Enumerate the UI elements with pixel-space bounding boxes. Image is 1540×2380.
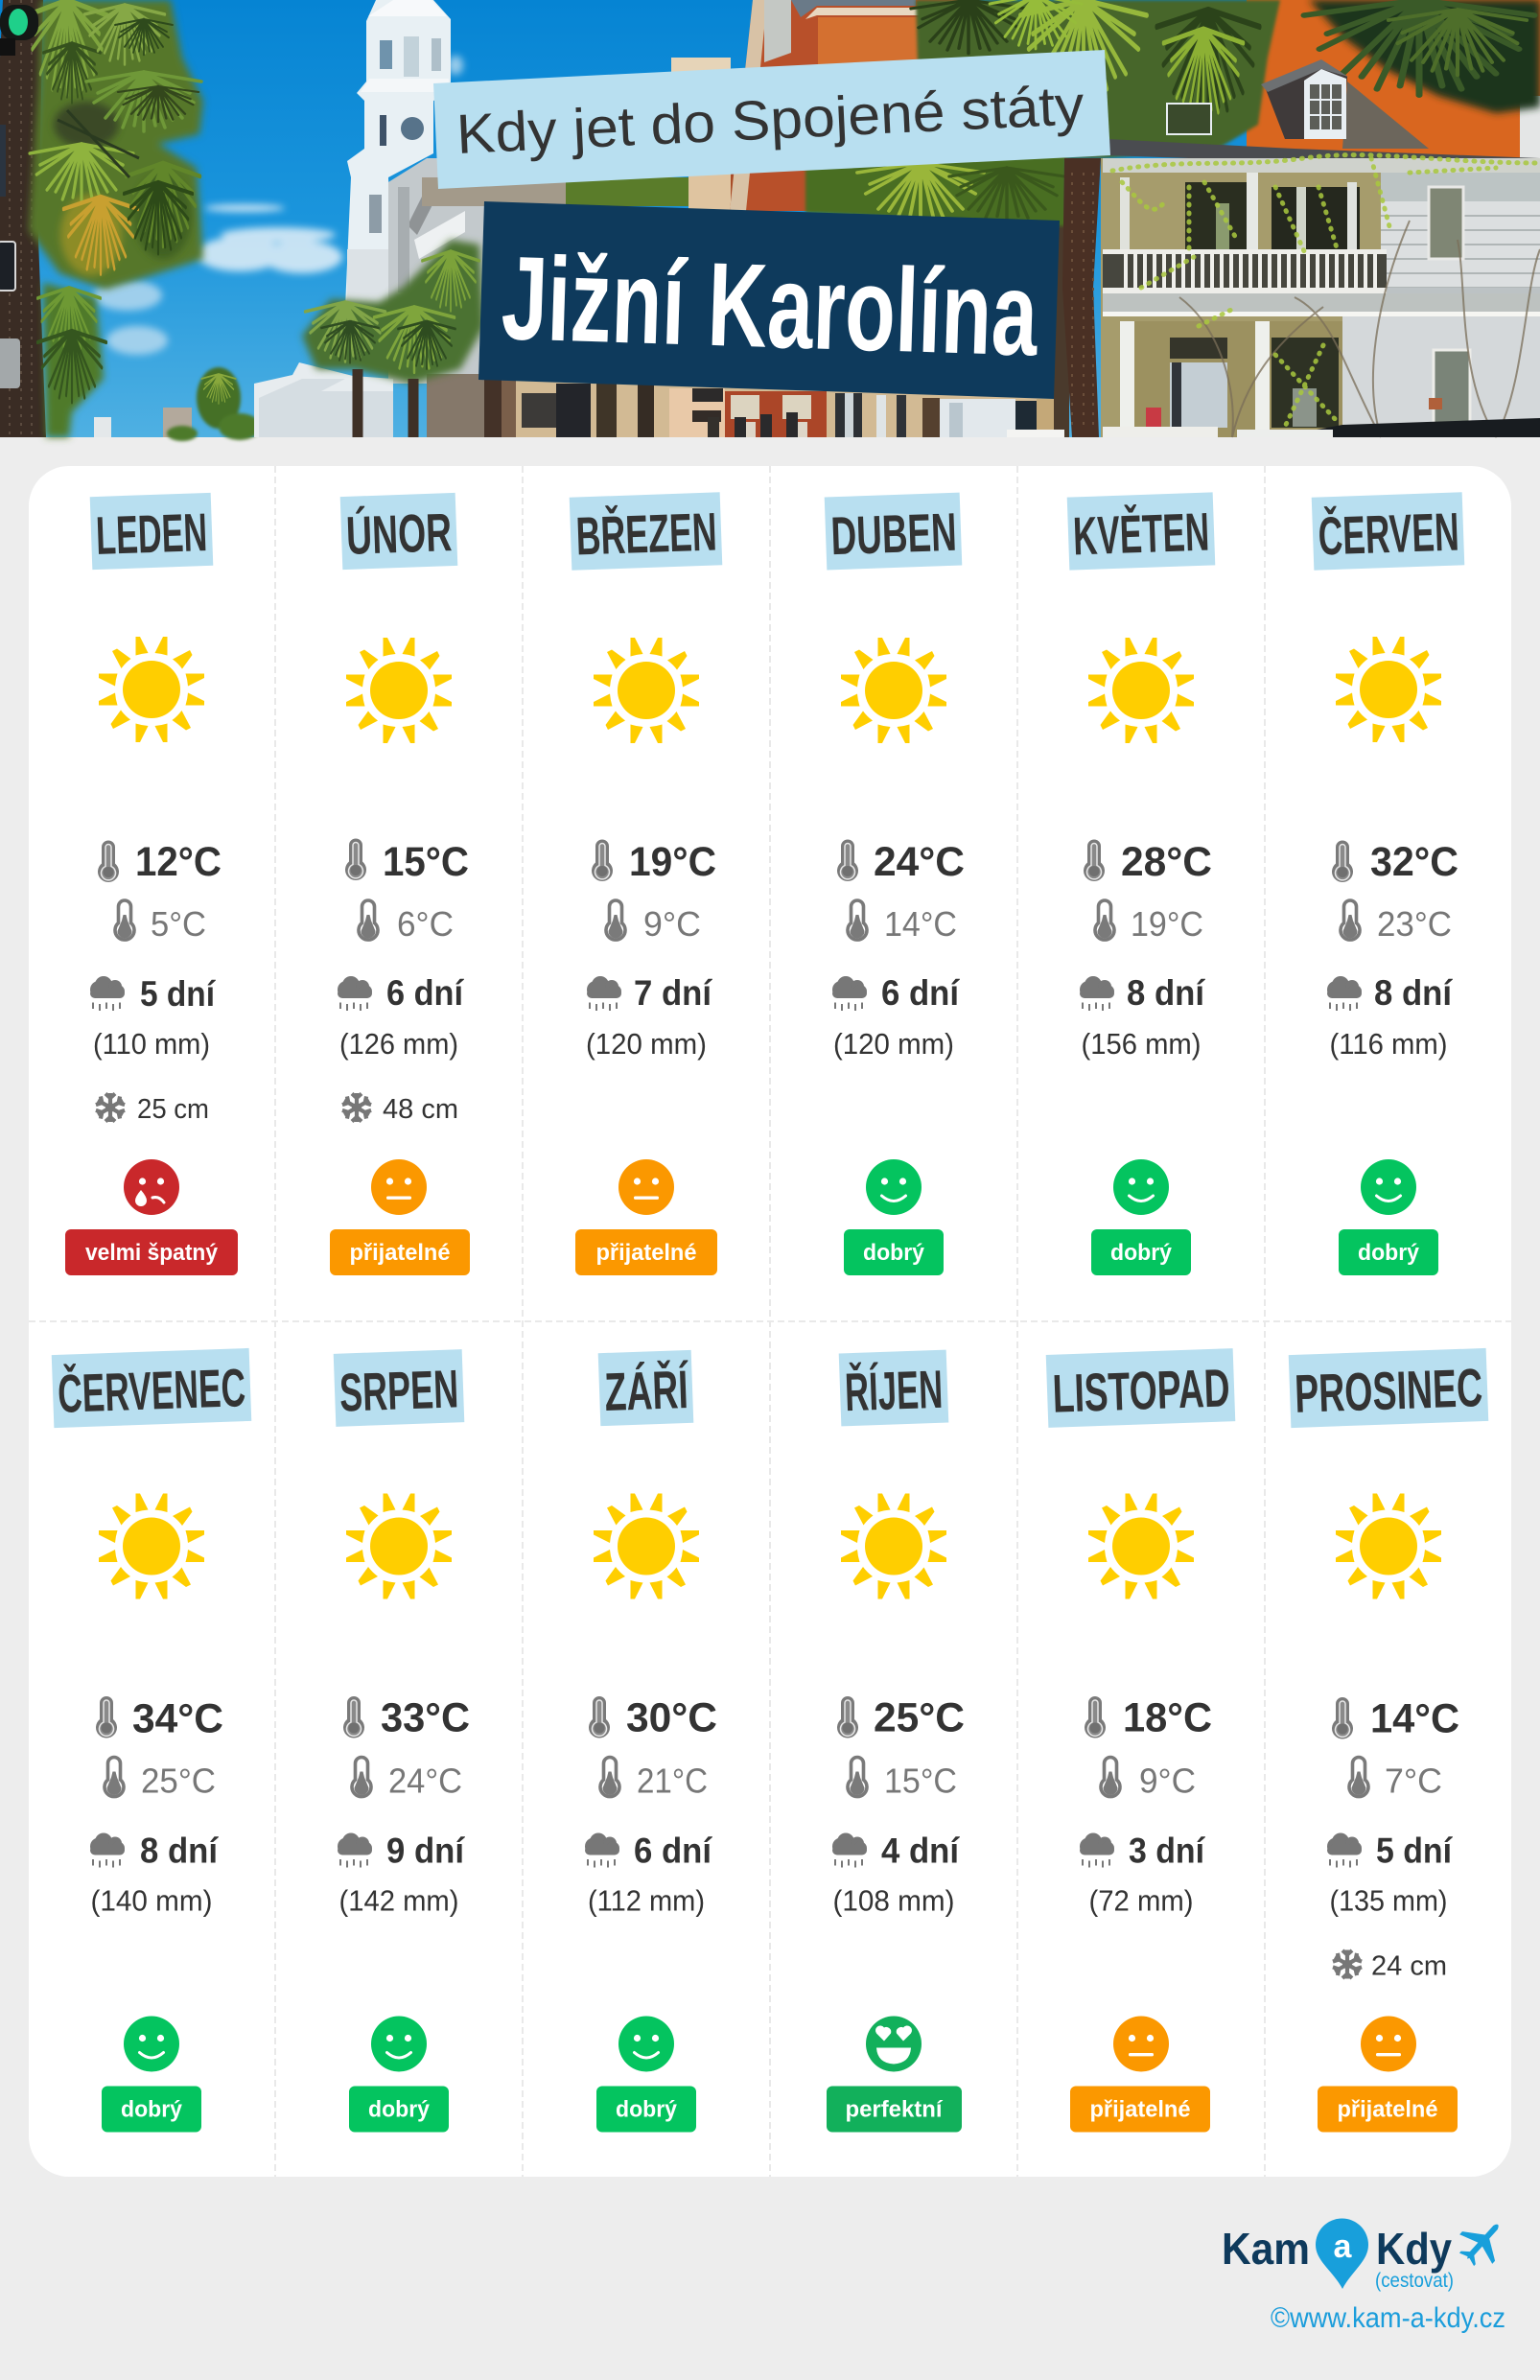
high temperature: 18°C [1123,1695,1212,1741]
low temperature [600,1757,708,1801]
icon: sun [1088,638,1194,743]
low temperature [359,900,454,944]
title label: Kdy jet do Spojené státy: Kdy jet do Spojené státy [455,74,1085,166]
icon: sun [594,1494,699,1599]
heading: ČERVEN [1318,501,1460,567]
rating face [1361,1159,1416,1215]
title label: Jižní Karolína [478,201,1060,399]
high temperature [98,839,222,885]
high temperature: 19°C [629,839,716,885]
low temperature: 9°C [1139,1761,1196,1801]
logo: Kam a Kdy: Kdy [1376,2224,1452,2274]
heading: SRPEN [338,1358,459,1423]
high temperature: 32°C [1370,839,1458,885]
heading: ŘÍJEN [844,1359,944,1422]
rating face [1361,2016,1416,2071]
rain days: 6 dní [881,973,961,1013]
rating badge: přijatelné [1337,2096,1438,2123]
heading [1312,492,1464,571]
high temperature [1332,839,1458,885]
high temperature: 14°C [1370,1695,1459,1741]
rating badge [1318,2087,1458,2133]
heading [598,1350,693,1426]
buildings behind title labels [422,177,575,206]
central low buildings [484,216,1069,437]
low temperature [606,900,701,944]
rain days [585,1832,713,1870]
heading [1046,1348,1235,1428]
left trunk and traffic light [0,0,46,437]
rain days [1327,973,1454,1013]
low temperature: 9°C [643,904,701,944]
low temperature: 25°C [141,1761,216,1801]
low temperature: 15°C [884,1761,957,1801]
orange-red building [671,0,959,211]
heading [825,493,962,570]
icon: sun [1336,637,1441,742]
low temperature [848,900,957,944]
snowfall [342,1093,458,1125]
heading: ÚNOR [345,502,453,566]
high temperature [1085,1695,1212,1741]
low temperature [1349,1757,1442,1801]
heading: LISTOPAD [1052,1357,1231,1424]
snowfall: 25 cm [137,1094,209,1125]
icon: sun [594,638,699,743]
traffic light and signs [0,5,38,40]
icon: sun [1336,1494,1441,1599]
high temperature [343,1695,470,1741]
rating badge: přijatelné [596,1240,696,1266]
rating face [1113,2016,1169,2071]
upper orange wall [1247,0,1540,163]
palms top right [805,0,1540,226]
low temperature: 19°C [1131,904,1203,944]
rain days: 3 dní [1129,1832,1206,1870]
month: leden [65,493,238,1275]
month: listopad [1046,1348,1235,2133]
rainfall: (135 mm) [1329,1883,1448,1918]
rating face [618,1159,674,1215]
month: duben [825,493,965,1275]
icon: sun [841,638,946,743]
high temperature [592,839,716,885]
rating badge: dobrý [121,2096,183,2123]
low temperature [115,900,206,944]
rating face [618,2016,674,2071]
rating badge: dobrý [616,2096,678,2123]
rating badge [827,2087,962,2133]
heading [839,1350,948,1426]
low temperature [1101,1757,1196,1801]
snowfall: 48 cm [383,1094,458,1125]
row 1: January to June [65,492,1464,1275]
small far buildings and palm [94,417,111,437]
white building [254,362,393,437]
rain days [338,1832,466,1870]
high temperature [345,838,469,885]
low temperature [848,1757,957,1801]
low temperature [1341,900,1452,944]
heading [1067,492,1215,571]
heading [334,1349,464,1427]
rain days [1327,1832,1454,1870]
rating badge [1070,2087,1210,2133]
high temperature: 34°C [132,1695,223,1741]
rating badge: velmi špatný [85,1240,219,1266]
rating badge [349,2087,449,2133]
high temperature: 12°C [135,839,222,885]
heading: ČERVENEC [57,1357,246,1424]
church tower [345,0,489,384]
rating badge: dobrý [1358,1240,1420,1266]
low temperature: 6°C [397,904,454,944]
low temperature: 14°C [884,904,957,944]
rain days [1080,1832,1206,1870]
icon: map pin: a [1334,2228,1353,2265]
rain days [587,973,713,1013]
rain days: 9 dní [386,1832,466,1870]
logo: Kam a Kdy [1222,2210,1514,2292]
rating face [1113,1159,1169,1215]
rain days: 5 dní [1376,1832,1454,1870]
heading: ZÁŘÍ [604,1359,690,1422]
vines and bare trees [1112,155,1540,437]
rainfall: (110 mm) [93,1027,210,1061]
icon: sun [99,1494,204,1599]
left palm [27,0,203,437]
rating badge [596,2087,696,2133]
copyright url: ©www.kam-a-kdy.cz [1271,2302,1505,2334]
icon: sun [346,1494,452,1599]
low temperature: 24°C [388,1761,462,1801]
low temperature [105,1757,216,1801]
rating badge: přijatelné [1089,2096,1191,2123]
month: prosinec [1289,1348,1488,2133]
rating badge: dobrý [368,2096,431,2123]
month: únor [330,493,470,1275]
rainfall: (156 mm) [1082,1027,1201,1061]
panel: climate calendar card [29,466,1511,2177]
snowfall [96,1093,209,1125]
header photo: Charleston street [0,0,1540,441]
rainfall: (142 mm) [339,1883,458,1918]
rain days: 7 dní [634,973,713,1013]
heading: KVĚTEN [1072,502,1210,566]
high temperature: 30°C [626,1695,717,1741]
low temperature: 21°C [637,1761,708,1801]
icon: sun [841,1494,946,1599]
rating badge [1339,1229,1438,1275]
icon: airplane [1450,2210,1514,2275]
rating badge [65,1229,238,1275]
heading [52,1348,251,1428]
month: březen [570,492,722,1275]
icon: sun [99,637,204,742]
rating face [371,2016,427,2071]
month: říjen [827,1350,965,2133]
rating face [371,1159,427,1215]
month: červen [1312,492,1464,1275]
rain days: 8 dní [1127,973,1206,1013]
title label: Kdy jet do Spojené státy [433,50,1110,189]
central palm trunk [1062,158,1101,437]
high temperature: 28°C [1121,839,1212,885]
rating face [124,2016,179,2071]
month: srpen [334,1349,470,2133]
rainfall: (108 mm) [832,1883,955,1918]
rating badge [330,1229,470,1275]
rating badge [844,1229,944,1275]
heading: BŘEZEN [575,501,718,567]
high temperature: 25°C [874,1695,965,1741]
row 2: July to December [52,1348,1488,2133]
month: červenec [52,1348,251,2133]
heading [340,493,457,570]
heading [570,492,722,571]
icon: sun [1088,1494,1194,1599]
rating badge: perfektní [846,2096,944,2123]
month: září [585,1350,717,2133]
rating badge: dobrý [1110,1240,1173,1266]
rain days [1080,973,1206,1013]
icon: sun [346,638,452,743]
low temperature: 23°C [1377,904,1452,944]
rain days: 4 dní [881,1832,961,1870]
rain days: 8 dní [140,1832,220,1870]
low temperature [1095,900,1203,944]
rainfall: (72 mm) [1089,1883,1193,1918]
rating badge: přijatelné [349,1240,451,1266]
white house [1101,59,1540,437]
rainfall: (120 mm) [586,1027,707,1061]
title label: Jižní Karolína: Jižní Karolína [500,232,1040,382]
logo: Kam a Kdy: Kam [1222,2224,1310,2274]
high temperature: 15°C [383,839,469,885]
rain days [832,1832,961,1870]
low temperature: 7°C [1385,1761,1442,1801]
rating badge [1091,1229,1191,1275]
icon: map pin [1316,2219,1368,2289]
rain days [338,973,465,1013]
rain days: 6 dní [634,1832,713,1870]
heading: DUBEN [830,502,958,566]
rating face [866,1159,922,1215]
month: květen [1067,492,1215,1275]
high temperature: 33°C [381,1695,470,1741]
rating badge [575,1229,717,1275]
rainfall: (140 mm) [90,1883,213,1918]
balcony [1103,249,1540,316]
logo: Kam a Kdy: (cestovat) [1375,2270,1454,2292]
high temperature: 24°C [874,839,965,885]
rain days: 8 dní [1374,973,1454,1013]
rating badge [102,2087,201,2133]
high temperature [1332,1695,1459,1741]
rating face [124,1159,179,1215]
low temperature [352,1757,462,1801]
rainfall: (120 mm) [833,1027,954,1061]
rainfall: (112 mm) [588,1883,705,1918]
central palms [302,240,484,437]
rain days [90,1832,220,1870]
snowfall: 24 cm [1371,1950,1447,1981]
heading: LEDEN [95,502,208,566]
rainfall: (126 mm) [339,1027,458,1061]
heading [90,493,213,570]
rating badge: dobrý [863,1240,925,1266]
heading [1289,1348,1488,1428]
rain days [90,974,217,1014]
rain days [832,973,961,1013]
rain days: 6 dní [386,973,465,1013]
low temperature: 5°C [151,904,206,944]
lower storey [1120,316,1540,437]
rain days: 5 dní [140,974,217,1014]
snowfall [1333,1950,1447,1981]
rating face [866,2016,922,2071]
rainfall: (116 mm) [1329,1027,1448,1061]
